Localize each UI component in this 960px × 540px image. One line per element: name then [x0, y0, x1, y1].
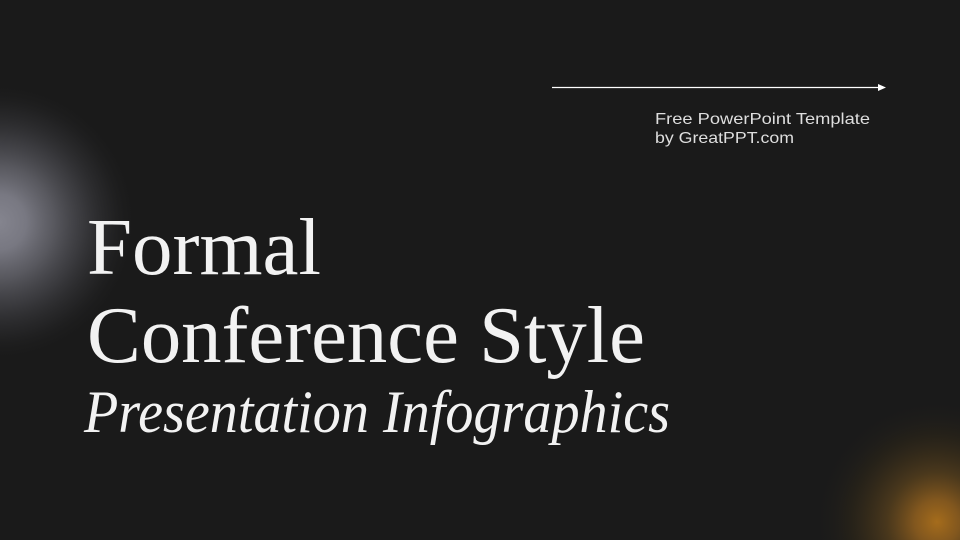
orange glow, bottom right corner	[810, 395, 960, 540]
title: Formal	[87, 204, 321, 292]
title: Conference Style	[87, 292, 645, 380]
grey glow, left edge	[0, 80, 140, 365]
subtitle: template credit: by GreatPPT.com	[655, 130, 794, 147]
title	[83, 204, 670, 445]
arrow	[552, 84, 886, 91]
subtitle: template credit	[655, 111, 870, 147]
title: Presentation Infographics	[83, 379, 670, 445]
subtitle: template credit: Free PowerPoint Template	[655, 111, 870, 128]
